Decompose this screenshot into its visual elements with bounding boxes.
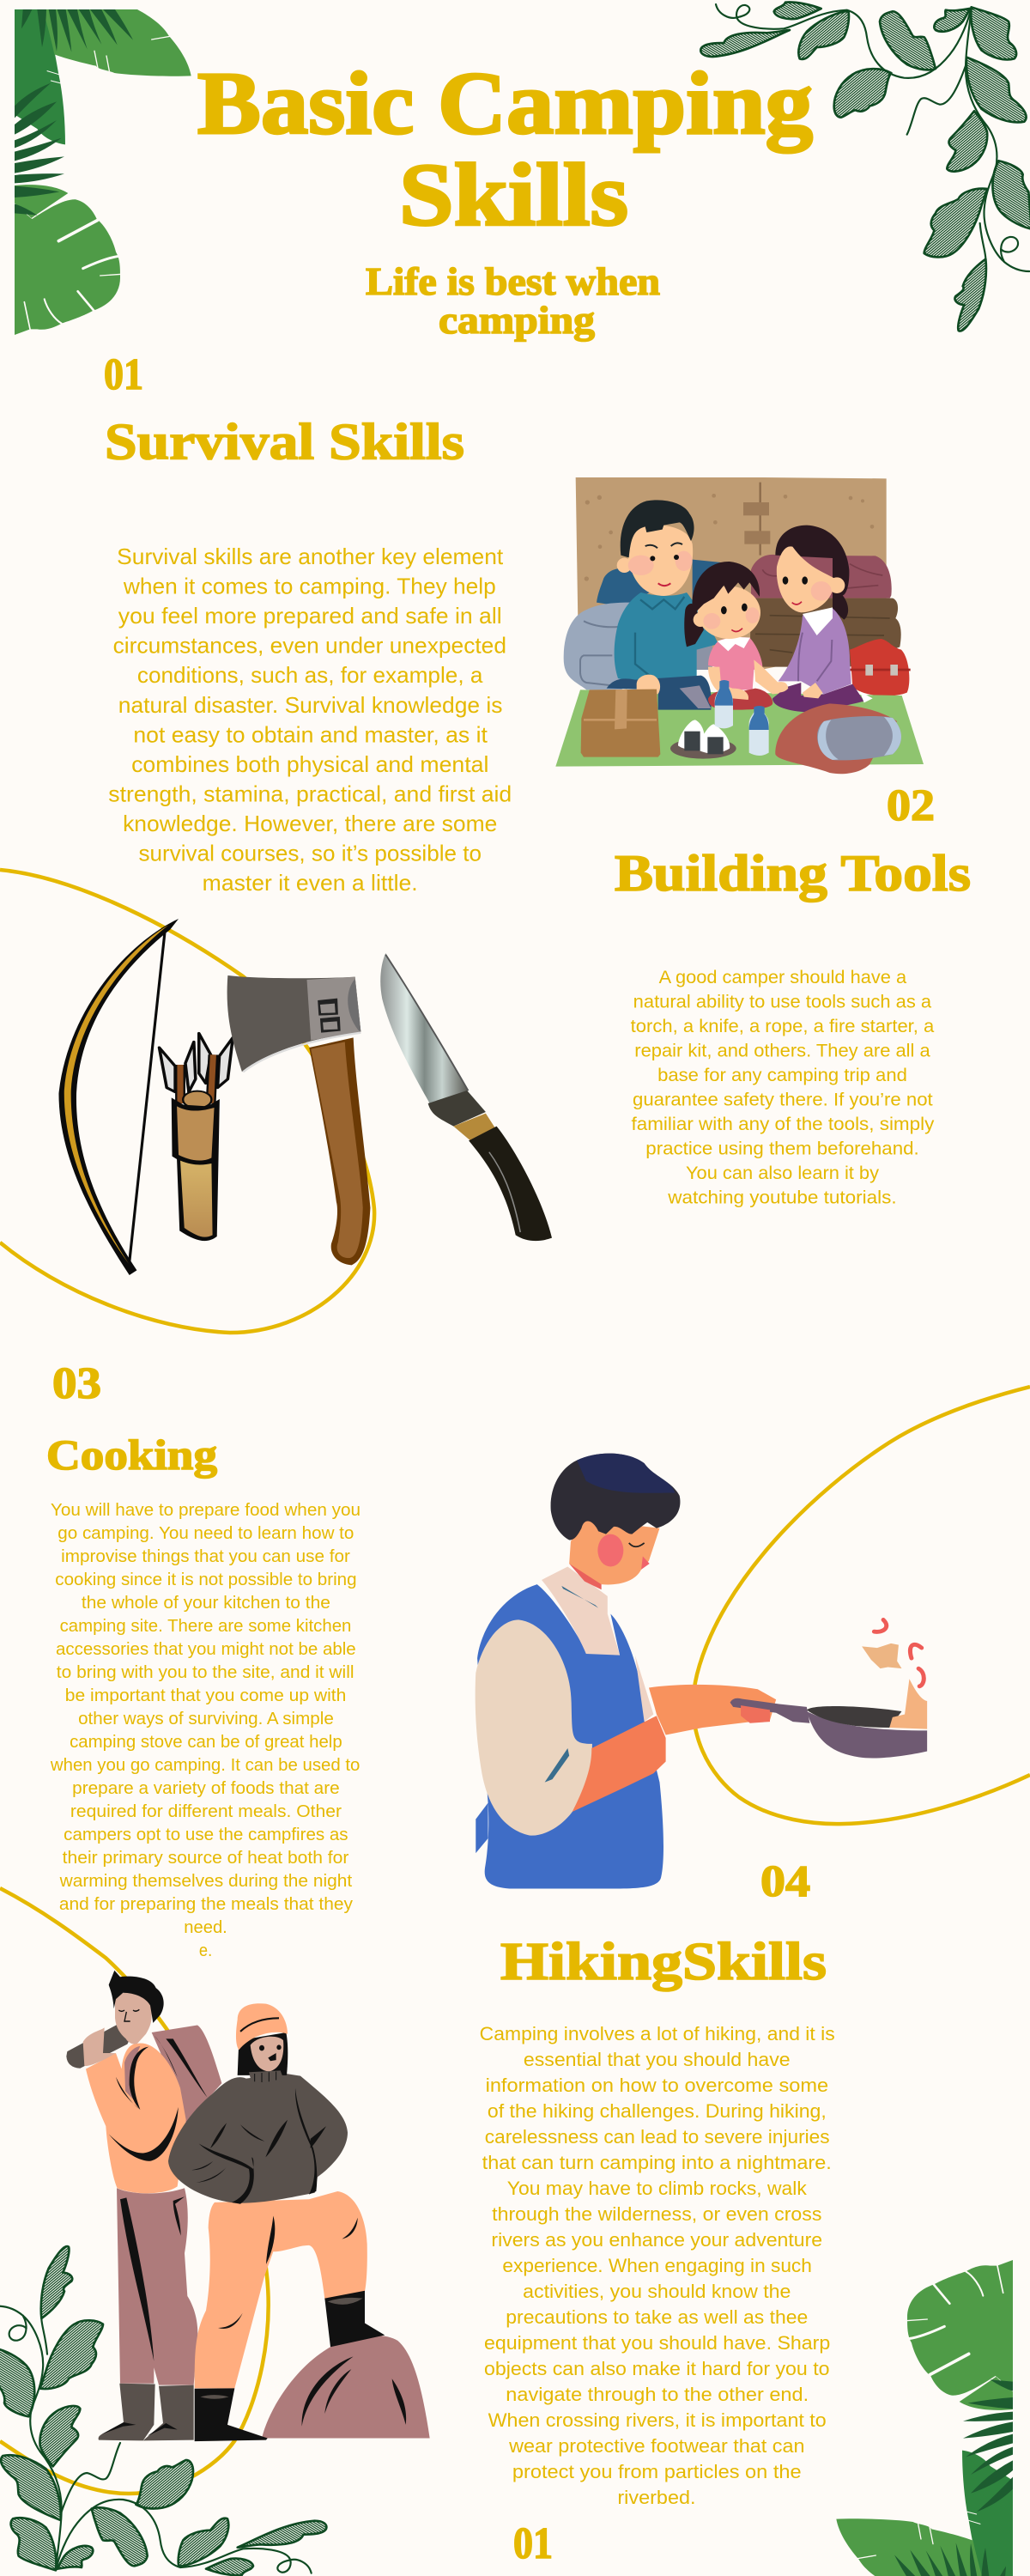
text block: hiking skills: objects can also make it hard for you to — [484, 2358, 829, 2379]
curve: yellow outline around tools — [0, 870, 374, 1333]
panel: hiking skills — [480, 1857, 835, 2508]
heading: hiking skills: HikingSkills — [500, 1933, 827, 1991]
icon: vine top right — [700, 2, 1030, 331]
icon: vine bottom left — [0, 2246, 326, 2575]
title — [197, 54, 813, 244]
text block: building tools: natural ability to use tools such as a — [633, 993, 931, 1012]
text block: survival skills: master it even a little. — [203, 870, 418, 896]
icon: knife — [380, 953, 552, 1241]
text block: building tools: practice using them beforehand. — [645, 1139, 919, 1159]
text block: hiking skills: rivers as you enhance your adventure — [491, 2229, 822, 2251]
text block: survival skills: circumstances, even under unexpected — [113, 633, 506, 659]
text block: cooking: the whole of your kitchen to the — [82, 1593, 330, 1613]
text block: cooking — [50, 1500, 360, 1960]
heading: cooking: Cooking — [46, 1431, 217, 1479]
text block: cooking: You will have to prepare food when you — [51, 1500, 360, 1520]
text block: building tools — [631, 968, 935, 1207]
text block: hiking skills: essential that you should have — [524, 2049, 791, 2070]
text block: survival skills: combines both physical and mental — [131, 751, 488, 777]
text block: survival skills: not easy to obtain and master, as it — [133, 721, 488, 747]
icon: axe — [227, 975, 370, 1265]
title: Basic Camping — [197, 54, 813, 153]
text block: cooking: and for preparing the meals that they — [59, 1894, 354, 1914]
text block: cooking: camping site. There are some kitchen — [60, 1616, 351, 1636]
text block: survival skills: when it comes to camping. They help — [123, 574, 496, 599]
icon: quiver and arrows — [160, 1033, 233, 1241]
text block: hiking skills: that can turn camping into a nightmare. — [482, 2152, 832, 2173]
text block: cooking: camping stove can be of great help — [70, 1732, 342, 1752]
text block: hiking skills: carelessness can lead to severe injuries — [485, 2126, 830, 2148]
number 02: 02 — [887, 781, 935, 830]
text block: cooking: go camping. You need to learn how to — [58, 1523, 354, 1543]
text block: hiking skills: of the hiking challenges. During hiking, — [488, 2100, 827, 2122]
text block: cooking: prepare a variety of foods that are — [72, 1778, 340, 1798]
text block: cooking: when you go camping. It can be used to — [50, 1755, 360, 1775]
icon: bow — [58, 919, 179, 1275]
text block: hiking skills: navigate through to the other end. — [506, 2384, 809, 2405]
text block: survival skills: Survival skills are another key element — [117, 544, 504, 569]
text block: hiking skills: through the wilderness, or even cross — [492, 2203, 821, 2225]
text block: survival skills: survival courses, so it’s possible to — [139, 840, 482, 866]
subtitle: Life is best when — [366, 259, 660, 303]
text block: hiking skills: equipment that you should have. Sharp — [484, 2332, 830, 2354]
illustration: two hikers on a rock — [66, 1971, 430, 2441]
text block: cooking: be important that you come up with — [65, 1686, 346, 1705]
text block: cooking: to bring with you to the site, and it will — [57, 1662, 354, 1682]
illustration: family camping — [555, 477, 924, 774]
icon: palm leaves bottom right — [836, 2260, 1013, 2576]
curve: yellow outline around hikers — [0, 1888, 269, 2494]
text block: hiking skills: experience. When engaging in such — [502, 2255, 812, 2276]
text block: survival skills: you feel more prepared and safe in all — [118, 603, 502, 629]
icon: palm leaves top left — [15, 9, 191, 335]
subtitle — [366, 259, 660, 342]
curve: yellow outline around cook — [694, 1387, 1030, 1824]
text block: survival skills: conditions, such as, for example, a — [137, 662, 483, 688]
number 01 at bottom: 01 — [513, 2519, 553, 2568]
text block: hiking skills: wear protective footwear that can — [508, 2435, 805, 2457]
text block: survival skills: strength, stamina, practical, and first aid — [108, 781, 512, 806]
panel: building tools — [615, 781, 971, 1207]
text block: cooking: warming themselves during the night — [59, 1871, 353, 1891]
text block: building tools: base for any camping trip and — [657, 1066, 907, 1085]
text block: hiking skills: information on how to overcome some — [486, 2075, 828, 2096]
text block: cooking: their primary source of heat both for — [63, 1848, 349, 1868]
text block: hiking skills: activities, you should know the — [523, 2281, 791, 2302]
text block: hiking skills: riverbed. — [617, 2487, 695, 2508]
text block: cooking: accessories that you might not be able — [56, 1639, 356, 1659]
text block: building tools: guarantee safety there. If you’re not — [633, 1091, 933, 1109]
title: Skills — [399, 146, 628, 244]
text block: survival skills — [108, 544, 512, 896]
text block: hiking skills: Camping involves a lot of hiking, and it is — [480, 2023, 835, 2044]
number 04: 04 — [760, 1857, 810, 1906]
number 03: 03 — [52, 1359, 101, 1408]
text block: cooking: improvise things that you can use for — [61, 1546, 350, 1566]
text block: cooking: e. — [199, 1941, 212, 1960]
text block: building tools: repair kit, and others. They are all a — [634, 1041, 930, 1061]
text block: hiking skills — [480, 2023, 835, 2508]
text block: hiking skills: protect you from particles on the — [512, 2461, 802, 2482]
panel: cooking — [46, 1359, 360, 1960]
heading: building tools: Building Tools — [615, 845, 971, 902]
text block: survival skills: knowledge. However, there are some — [123, 811, 497, 836]
text block: hiking skills: precautions to take as well as thee — [506, 2306, 808, 2328]
panel: survival skills — [104, 350, 512, 896]
text block: cooking: required for different meals. Other — [70, 1801, 342, 1821]
text block: cooking: other ways of surviving. A simple — [78, 1709, 334, 1728]
text block: cooking: need. — [184, 1917, 227, 1937]
text block: hiking skills: When crossing rivers, it is important to — [488, 2409, 827, 2431]
number 01: 01 — [104, 350, 143, 399]
text block: building tools: watching youtube tutorials. — [667, 1188, 897, 1207]
text block: building tools: A good camper should have a — [659, 968, 906, 987]
text block: building tools: You can also learn it by — [686, 1163, 880, 1183]
text block: building tools: torch, a knife, a rope, a fire starter, a — [631, 1017, 935, 1036]
text block: cooking: cooking since it is not possible to bring — [55, 1570, 357, 1589]
text block: building tools: familiar with any of the tools, simply — [632, 1115, 935, 1134]
subtitle: camping — [439, 298, 595, 342]
illustration: bow, quiver, axe and knife — [58, 919, 552, 1275]
illustration: cook with frying pan — [476, 1454, 927, 1888]
heading: survival skills: Survival Skills — [105, 414, 464, 471]
text block: cooking: campers opt to use the campfires as — [64, 1825, 348, 1844]
text block: survival skills: natural disaster. Survival knowledge is — [118, 692, 503, 718]
text block: hiking skills: You may have to climb rocks, walk — [507, 2178, 808, 2199]
